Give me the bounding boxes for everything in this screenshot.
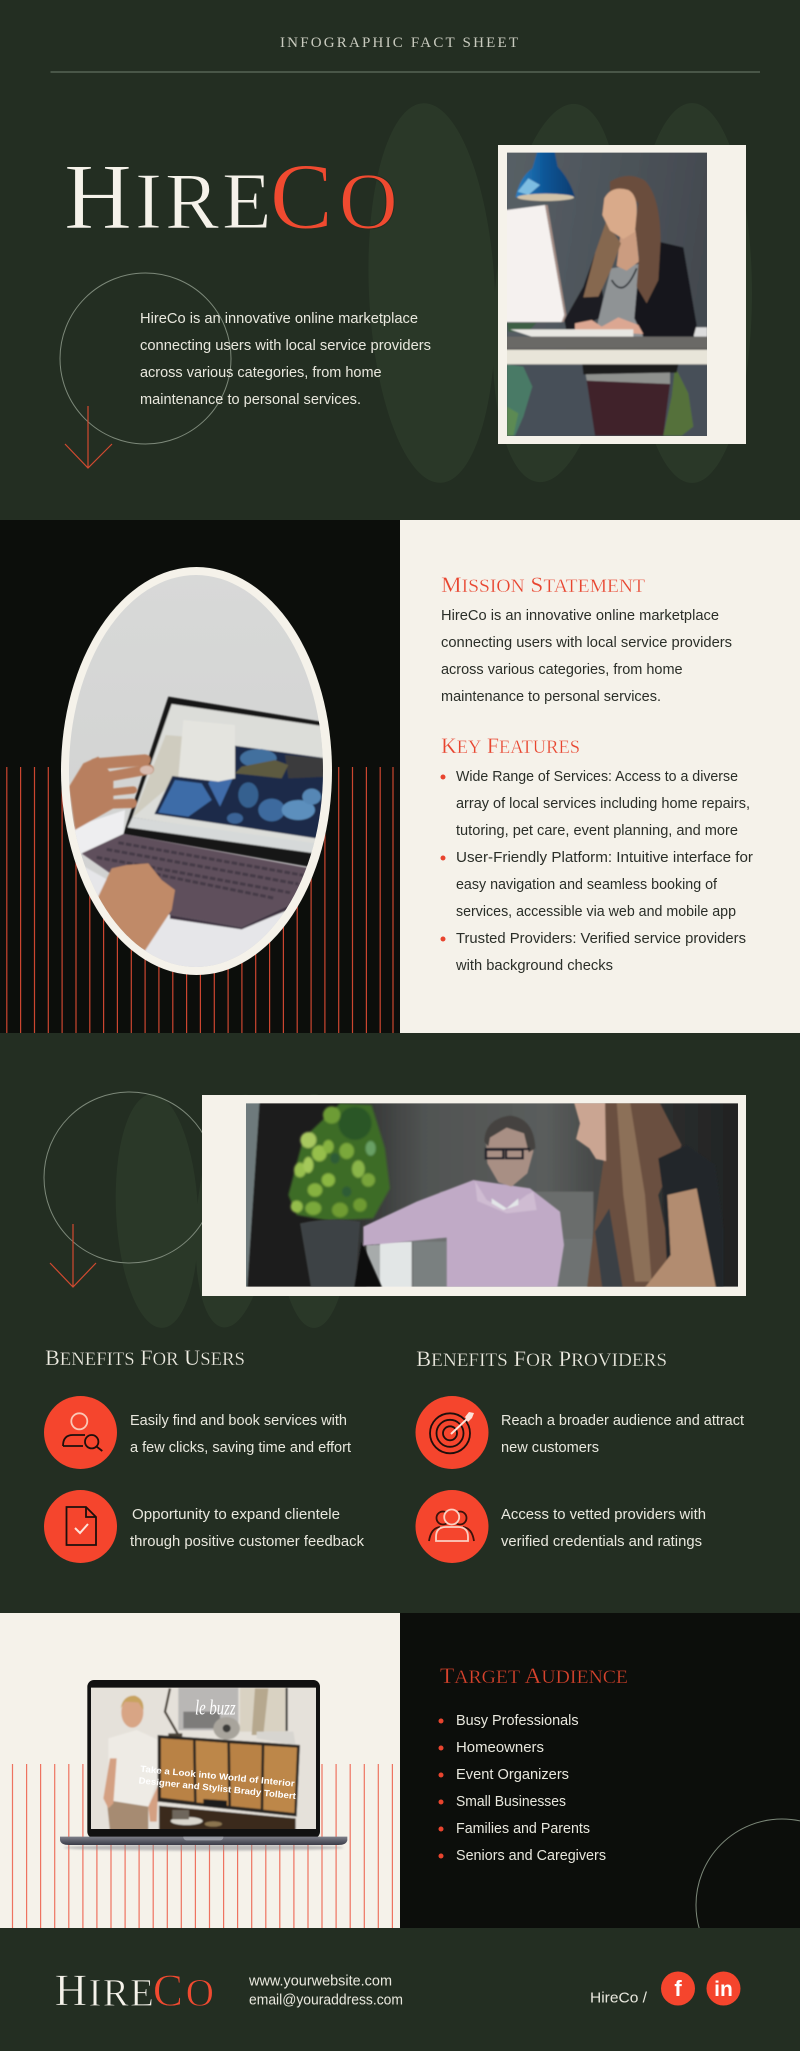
footer logo: HireCo: H	[55, 1966, 87, 2016]
benefit text: find and book	[130, 1413, 351, 1456]
icon: facebook: f	[674, 1976, 682, 2001]
mission paragraph: across various categories, from home	[441, 662, 683, 678]
benefit text: broader audience: Reach a broader audience and attract	[501, 1413, 744, 1429]
benefit text: broader audience	[501, 1413, 744, 1456]
section: footer	[0, 1928, 800, 2051]
eyebrow label: INFOGRAPHIC FACT SHEET	[280, 35, 518, 51]
contact details	[248, 1974, 403, 2009]
heading: key features: KEY FEATURES	[441, 733, 580, 758]
arrow down	[65, 406, 112, 468]
heading: target audience: TARGET AUDIENCE	[440, 1663, 628, 1688]
outline circle cropped at corner	[696, 1818, 800, 1928]
laptop mockup	[60, 1680, 347, 1851]
key features list: Wide Range of Services: Access to a diverse	[456, 769, 738, 785]
title: HireCo: IRE	[135, 156, 271, 246]
mission paragraph	[441, 608, 732, 705]
title: HireCo: H	[64, 145, 132, 249]
icon: facebook	[661, 1972, 695, 2006]
icon: target with arrow	[416, 1396, 488, 1469]
key features list: Trusted Providers: Verified service providers	[456, 931, 746, 947]
heading: mission statement: MISSION STATEMENT	[441, 572, 645, 597]
key features list: easy navigation and seamless booking of	[456, 877, 717, 893]
audience list: Homeowners	[456, 1740, 544, 1756]
section: target audience	[0, 1613, 800, 1928]
intro paragraph: connecting users with local service providers	[140, 338, 431, 354]
audience list: Busy Professionals	[456, 1713, 579, 1729]
photo: man and woman at desk	[202, 1095, 750, 1296]
key features list	[440, 769, 753, 974]
mission paragraph: connecting users with local service providers	[441, 635, 732, 651]
intro paragraph: maintenance to personal services.	[140, 392, 361, 408]
audience list: Seniors and Caregivers	[456, 1848, 606, 1864]
footer logo: HireCo: O	[186, 1972, 214, 2015]
arrow down	[50, 1224, 96, 1287]
footer logo: HireCo: C	[153, 1966, 183, 2016]
mission paragraph: maintenance to personal services.	[441, 689, 661, 705]
icon: document check	[44, 1490, 117, 1563]
key features list: with background checks	[455, 958, 613, 974]
contact details: www.yourwebsite.com	[248, 1974, 392, 1990]
title: HireCo: C	[270, 145, 333, 249]
hero text in laptop screen: Designer and Stylist Brady Tolbert	[138, 1775, 296, 1801]
benefit text: vetted providers: verified credentials and ratings	[501, 1534, 702, 1550]
outline circle	[60, 273, 231, 444]
contact details: email@youraddress.com	[249, 1993, 403, 2009]
benefit text: vetted providers: Access to vetted providers with	[501, 1507, 706, 1523]
icon: group of people	[416, 1490, 488, 1563]
icon: user search	[44, 1396, 117, 1469]
audience list: Small Businesses	[456, 1794, 566, 1810]
decorative ovals	[360, 98, 752, 488]
heading: benefits for users: BENEFITS FOR USERS	[45, 1345, 245, 1370]
photo: woman at standing desk	[498, 145, 746, 444]
benefit text: expand clientele: through positive customer feedback	[130, 1534, 365, 1550]
hero text in laptop screen: Take a Look into World of Interior	[140, 1764, 296, 1789]
key features list: array of local services including home repairs,	[456, 796, 750, 812]
benefit text: expand clientele	[130, 1507, 365, 1550]
intro paragraph	[140, 311, 431, 408]
icon: linkedin: in	[714, 1978, 733, 2001]
title: HireCo: O	[339, 156, 398, 246]
intro paragraph: across various categories, from home	[140, 365, 382, 381]
social handle: HireCo /	[590, 1991, 647, 2007]
key features list: services, accessible via web and mobile app	[456, 904, 736, 920]
hero text in laptop screen	[138, 1764, 296, 1801]
outline circle	[44, 1092, 215, 1263]
key features list: tutoring, pet care, event planning, and more	[456, 823, 738, 839]
benefit text: vetted providers	[501, 1507, 706, 1550]
heading: benefits for providers: BENEFITS FOR PROVIDERS	[416, 1346, 667, 1371]
mission paragraph: HireCo is an innovative online marketplace	[441, 608, 719, 624]
laptop mockup: le buzz	[195, 1695, 236, 1719]
benefit text: broader audience: new customers	[501, 1440, 599, 1456]
audience list: Event Organizers	[456, 1767, 569, 1783]
footer logo: HireCo: IRE	[88, 1972, 154, 2015]
section: mission and features	[0, 520, 800, 1033]
key features list: User-Friendly Platform: Intuitive interface for	[456, 850, 753, 866]
icon: linkedin	[706, 1972, 740, 2006]
benefit text: find and book: a few clicks, saving time and effort	[130, 1440, 351, 1456]
photo: laptop in oval frame	[55, 567, 332, 983]
intro paragraph: HireCo is an innovative online marketplace	[140, 311, 418, 327]
section: benefits	[44, 1092, 746, 1563]
section: hero header	[50, 38, 760, 483]
benefit text: expand clientele: Opportunity to expand clientele	[132, 1507, 340, 1523]
audience list: Families and Parents	[456, 1821, 590, 1837]
benefit text: find and book: Easily find and book services with	[130, 1413, 347, 1429]
audience list	[438, 1713, 606, 1864]
